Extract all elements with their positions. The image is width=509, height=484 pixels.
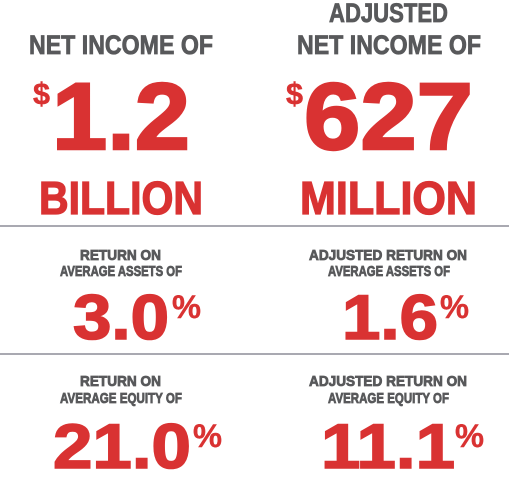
panel: adjusted net income — [286, 0, 481, 224]
unit: billion: BILLION — [39, 172, 203, 224]
heading: net income of: NET INCOME OF — [29, 30, 213, 60]
panel: return on average equity — [53, 374, 222, 482]
heading: net income of: NET INCOME OF — [297, 30, 481, 60]
label: average equity of: AVERAGE EQUITY OF — [60, 391, 182, 407]
percent sign: % — [440, 289, 469, 325]
value: 1.2: 1.2 — [52, 64, 190, 170]
percent sign: % — [455, 418, 484, 454]
label: return on: RETURN ON — [80, 248, 161, 264]
panel: net income — [29, 30, 213, 224]
panel: adjusted return on average assets — [309, 248, 469, 353]
percent sign: % — [193, 418, 222, 454]
label: average assets of: AVERAGE ASSETS OF — [328, 264, 450, 280]
unit: million: MILLION — [300, 172, 477, 224]
label: adjusted return on: ADJUSTED RETURN ON — [309, 374, 467, 390]
percent sign: % — [172, 289, 201, 325]
label: adjusted return on: ADJUSTED RETURN ON — [309, 248, 467, 264]
dollar sign: $ — [286, 76, 303, 111]
value: 1.6: 1.6 — [342, 283, 438, 353]
panel: adjusted return on average equity — [309, 374, 484, 482]
panel: return on average assets — [60, 248, 201, 353]
value: 21.0: 21.0 — [53, 412, 191, 482]
value: 3.0: 3.0 — [73, 283, 169, 353]
value: 627: 627 — [304, 64, 473, 170]
label: average equity of: AVERAGE EQUITY OF — [328, 391, 449, 407]
label: return on: RETURN ON — [80, 374, 161, 390]
label: average assets of: AVERAGE ASSETS OF — [60, 264, 182, 280]
value: 11.1: 11.1 — [321, 412, 455, 482]
dollar sign: $ — [33, 76, 50, 111]
